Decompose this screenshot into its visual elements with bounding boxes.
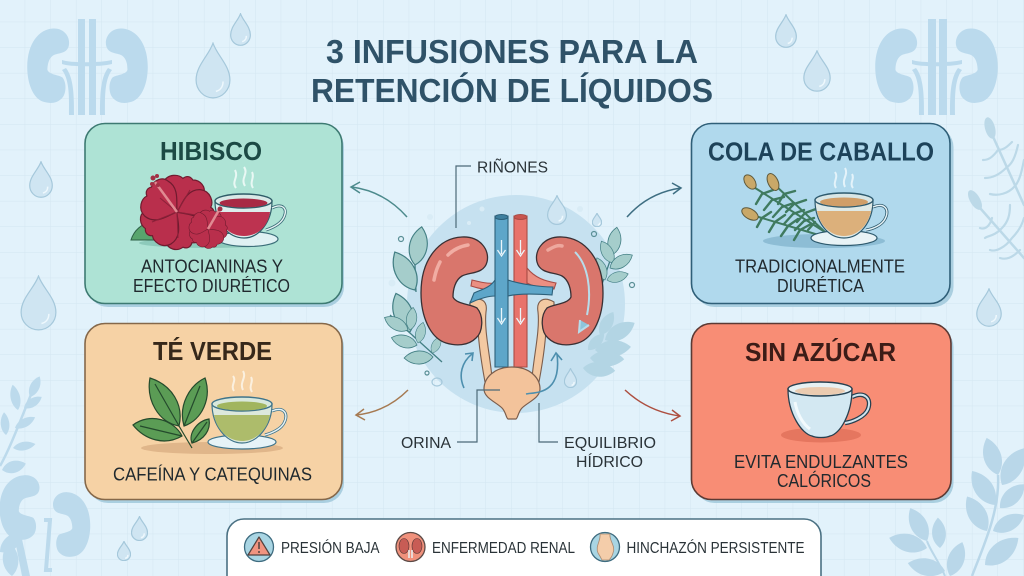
central kidney illustration: [382, 195, 639, 419]
decoration: bottom-right foliage: [887, 435, 1024, 576]
foliage: left sprigs: [382, 225, 444, 365]
title: RETENCIÓN DE LÍQUIDOS: [311, 72, 713, 109]
icon: swollen ankle: [590, 532, 620, 562]
text: sin azúcar description: CALÓRICOS: [777, 470, 871, 491]
panel: hibisco: [85, 124, 344, 307]
text: hibisco description: EFECTO DIURÉTICO: [133, 276, 290, 296]
decoration: top-right kidneys: [875, 19, 998, 115]
title: 3 INFUSIONES PARA LA: [326, 33, 698, 70]
small hibiscus flower: [186, 208, 229, 251]
bladder: [484, 367, 540, 419]
text: presión baja: PRESIÓN BAJA: [281, 540, 380, 557]
text: enfermedad renal: ENFERMEDAD RENAL: [432, 540, 575, 557]
blood vessels: [470, 214, 556, 367]
arrow: to té verde: [356, 390, 408, 420]
panel: té verde: [85, 324, 344, 503]
icon: plain white cup: [781, 382, 869, 442]
water drops and dots: [388, 196, 634, 388]
arrow: to sin azúcar: [625, 390, 680, 421]
heading: cola de caballo: COLA DE CABALLO: [708, 136, 934, 166]
kidneys: [421, 237, 603, 345]
decoration: top-left kidneys: [27, 19, 148, 115]
arrow: to hibisco: [351, 182, 407, 217]
kidney flow arrow: [575, 252, 589, 332]
label: equilibrio hídrico: EQUILIBRIO: [564, 435, 656, 452]
flow arrows: [461, 353, 562, 394]
text: sin azúcar description: EVITA ENDULZANTES: [734, 452, 908, 472]
label: riñones: RIÑONES: [477, 156, 548, 176]
decoration: horsetail right: [965, 116, 1024, 259]
panel: cola de caballo: [692, 124, 954, 307]
big hibiscus flower: [134, 171, 215, 254]
arrow: to cola de caballo: [627, 183, 681, 217]
text: cola de caballo description: [735, 256, 905, 296]
label: equilibrio hídrico: [539, 403, 656, 471]
heading: sin azúcar: SIN AZÚCAR: [745, 337, 896, 367]
icon: horsetail and herbal tea cup: [740, 168, 887, 248]
kidney highlights: [434, 245, 562, 280]
label: orina: ORINA: [401, 435, 451, 452]
text: hibisco description: [133, 256, 290, 296]
text: sin azúcar description: [734, 452, 908, 491]
title: [311, 33, 713, 109]
label: equilibrio hídrico: HÍDRICO: [576, 452, 643, 471]
label: riñones: [456, 156, 548, 228]
icon: kidney disease: [396, 532, 425, 562]
label: orina: [401, 390, 500, 452]
heading: té verde: TÉ VERDE: [153, 336, 272, 366]
icon: hibiscus flowers and red tea cup: [131, 167, 285, 254]
decoration: bottom-left foliage and kidneys: [0, 374, 90, 576]
icon: green tea leaves and cup: [133, 371, 286, 454]
text: cola de caballo description: DIURÉTICA: [777, 276, 864, 296]
icon: warning: [244, 532, 274, 562]
text: hibisco description: ANTOCIANINAS Y: [141, 256, 283, 276]
ureters: [470, 299, 554, 382]
panel: sin azúcar: [692, 324, 954, 503]
text: té verde description: CAFEÍNA Y CATEQUINAS: [113, 464, 312, 484]
text: hinchazón persistente: HINCHAZÓN PERSISTENTE: [626, 540, 804, 557]
foliage: right sprigs: [592, 226, 635, 290]
heading: hibisco: HIBISCO: [160, 136, 262, 166]
panel: warnings legend: [227, 519, 821, 576]
text: cola de caballo description: TRADICIONALMENTE: [735, 256, 905, 276]
